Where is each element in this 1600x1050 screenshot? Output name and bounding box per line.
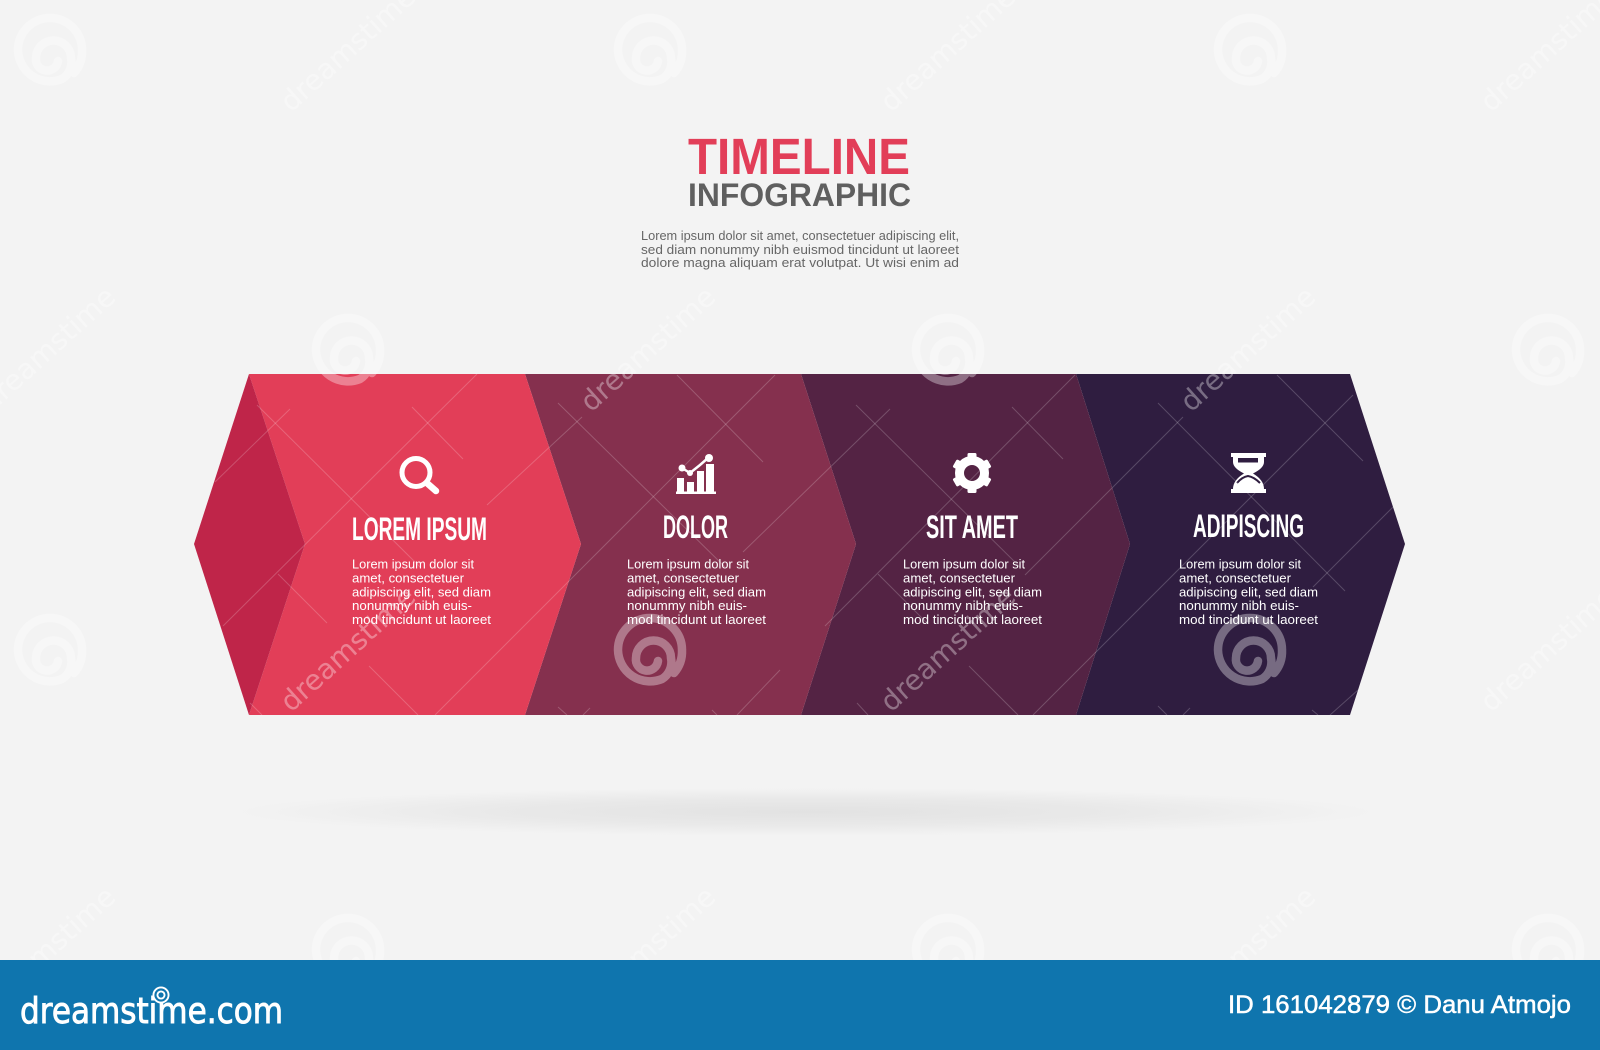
watermark wordmarks: dreamstime (874, 580, 1022, 718)
step 4 text: Lorem ipsum dolor sit (1179, 556, 1301, 572)
step 3 heading: SIT AMET (926, 509, 1018, 545)
ground shadow (236, 788, 1376, 836)
icon: hourglass (1231, 453, 1266, 493)
step 4 text: amet, consectetuer (1179, 570, 1292, 586)
panel: step 1 arrow (249, 374, 581, 715)
step 3 text: mod tincidunt ut laoreet (903, 612, 1042, 627)
title block (641, 128, 959, 270)
step 2 text: amet, consectetuer (627, 570, 740, 586)
heading: infographic: INFOGRAPHIC (688, 177, 911, 213)
step 4 heading: ADIPISCING (1193, 508, 1304, 544)
step 3 text: nonummy nibh euis- (903, 598, 1023, 613)
step 1 text (352, 556, 491, 627)
step 1 content (352, 458, 491, 627)
timeline arrow band (194, 374, 1405, 715)
watermark wordmarks: dreamstime (574, 280, 722, 418)
watermark wordmarks: dreamstime (1174, 280, 1322, 418)
intro paragraph: sed diam nonummy nibh euismod tincidunt ut laoreet (641, 242, 959, 257)
step 1 text: Lorem ipsum dolor sit (352, 556, 474, 572)
step 4 text: mod tincidunt ut laoreet (1179, 612, 1318, 627)
intro paragraph: dolore magna aliquam erat volutpat. Ut wisi enim ad (641, 255, 959, 270)
intro paragraph (641, 228, 959, 270)
panel: step 3 arrow (801, 374, 1130, 715)
step 2 text: mod tincidunt ut laoreet (627, 612, 766, 627)
step 4 content (1179, 453, 1318, 627)
step 2 text: nonummy nibh euis- (627, 598, 747, 613)
step 1 text: nonummy nibh euis- (352, 598, 472, 613)
step 1 text: adipiscing elit, sed diam (352, 584, 491, 600)
watermark wordmarks: dreamstime (274, 580, 422, 718)
step 1 text: mod tincidunt ut laoreet (352, 612, 491, 627)
panel: step 2 arrow (525, 374, 856, 715)
step 2 heading: DOLOR (663, 509, 728, 545)
intro paragraph: Lorem ipsum dolor sit amet, consectetuer adipiscing elit, (641, 228, 959, 243)
step 1 heading: LOREM IPSUM (352, 511, 487, 547)
icon: growth chart (676, 454, 716, 494)
panel: left folded cap (194, 374, 305, 715)
step 4 text: adipiscing elit, sed diam (1179, 584, 1318, 600)
heading: timeline: TIMELINE (688, 128, 910, 185)
icon: magnifying glass (402, 458, 436, 491)
step 3 text (903, 556, 1042, 627)
footer logo: dreamstime.com (20, 991, 283, 1032)
watermark crossing lines (215, 374, 1393, 715)
step 2 text (627, 556, 766, 627)
step 2 text: Lorem ipsum dolor sit (627, 556, 749, 572)
step 4 text: nonummy nibh euis- (1179, 598, 1299, 613)
step 4 text (1179, 556, 1318, 627)
icon: gear (952, 453, 992, 493)
image credit: ID 161042879 © Danu Atmojo (1228, 991, 1571, 1019)
watermark wordmarks: dreamstime (574, 880, 722, 1018)
step 1 text: amet, consectetuer (352, 570, 465, 586)
step 3 text: Lorem ipsum dolor sit (903, 556, 1025, 572)
step 3 content (903, 453, 1042, 627)
step 3 text: adipiscing elit, sed diam (903, 584, 1042, 600)
footer bar (0, 960, 1600, 1050)
step 2 text: adipiscing elit, sed diam (627, 584, 766, 600)
step 3 text: amet, consectetuer (903, 570, 1016, 586)
panel: step 4 arrow (1076, 374, 1405, 715)
step 2 content (627, 454, 766, 627)
watermark wordmarks: dreamstime (1174, 880, 1322, 1018)
